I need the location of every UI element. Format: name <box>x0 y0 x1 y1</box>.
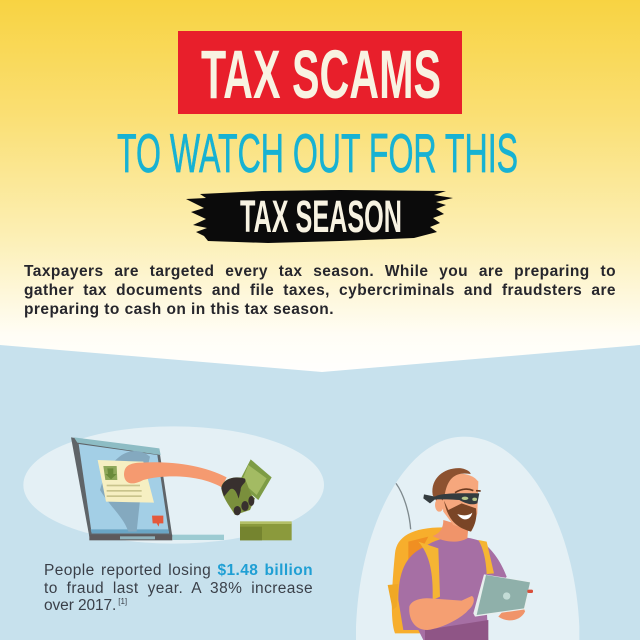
heading: tax season brush banner: TAX SEASON <box>240 191 402 242</box>
background gradient <box>0 0 640 380</box>
icon: antenna <box>396 483 411 529</box>
panel: masked scammer illustration <box>356 437 579 640</box>
icon: money stack <box>240 521 292 540</box>
text block: intro paragraph: Taxpayers are targeted every tax season. While you are preparing to <box>24 263 616 280</box>
text block: fraud statistic <box>44 562 313 614</box>
icon: document on screen <box>98 460 154 503</box>
icon: shoulder straps <box>418 540 494 600</box>
icon: head <box>423 468 481 532</box>
heading: tax season brush banner <box>186 190 453 243</box>
icon: gloved hand <box>221 477 255 515</box>
icon: laptop <box>71 437 224 540</box>
icon: forearm and hand <box>409 596 525 630</box>
panel: blue lower section <box>0 345 640 640</box>
icon: reaching arm <box>124 462 227 487</box>
icon: backpack <box>388 527 443 633</box>
title: tax scams banner: TAX SCAMS <box>201 36 441 113</box>
panel: laptop fraud illustration <box>23 426 324 544</box>
backdrop ellipse <box>23 426 324 544</box>
text block: fraud statistic: People reported losing $1.48 billion <box>44 562 313 579</box>
text block: fraud statistic: over 2017.[1] <box>44 597 127 614</box>
icon: neck <box>433 520 468 542</box>
text block: intro paragraph <box>24 263 616 318</box>
text block: fraud statistic: to fraud last year. A 38% increase <box>44 580 313 597</box>
icon: tablet <box>473 574 533 617</box>
text block: intro paragraph: gather tax documents and file taxes, cybercriminals and fraudsters are <box>24 282 616 299</box>
icon: red flag on screen <box>152 516 163 527</box>
icon: torso <box>398 537 507 640</box>
title: tax scams banner <box>178 31 462 114</box>
text block: intro paragraph: preparing to cash on in this tax season. <box>24 301 334 318</box>
icon: cash in hand <box>238 459 272 500</box>
backdrop arch <box>356 437 579 640</box>
